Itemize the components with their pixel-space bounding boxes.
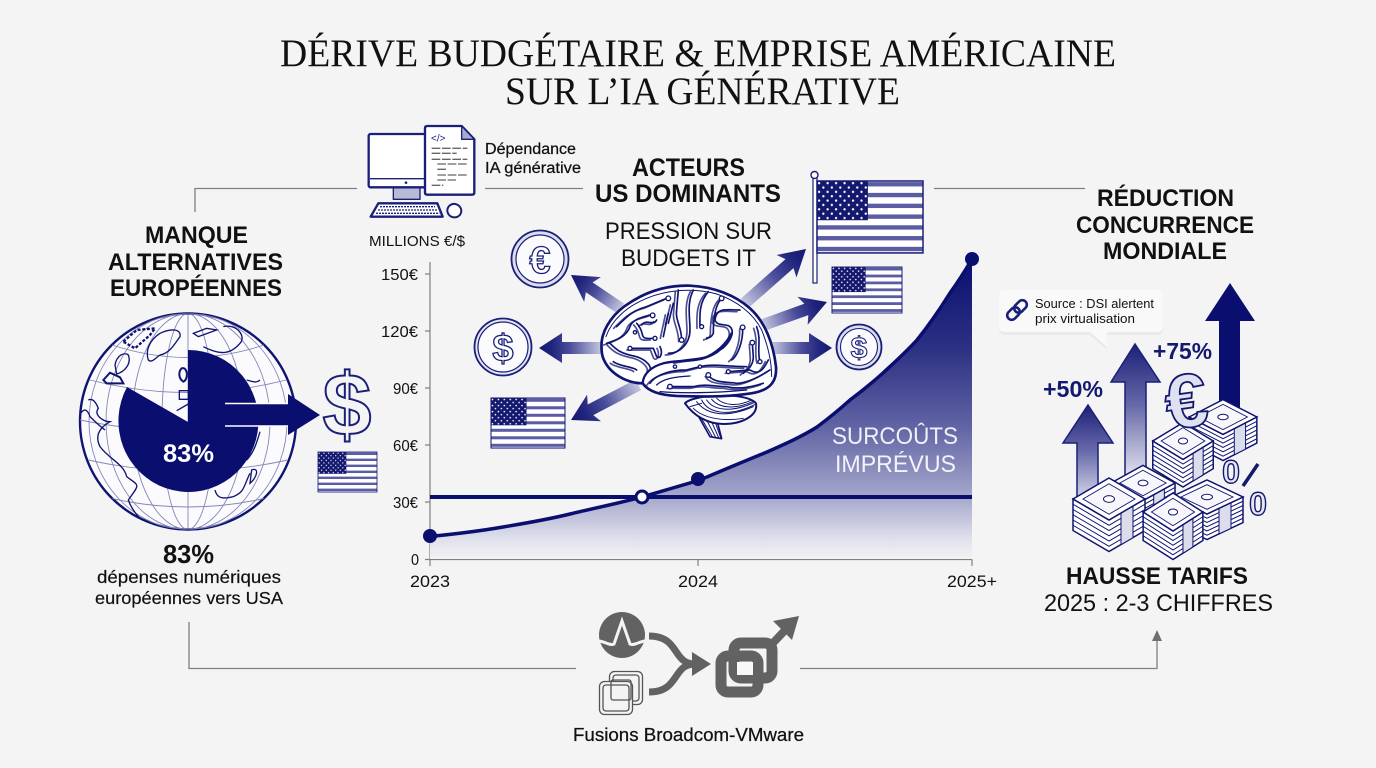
title: SUR L’IA GÉNÉRATIVE: [505, 69, 900, 113]
icon: Broadcom VMware merger: [599, 612, 799, 714]
icon: circuit brain: [601, 286, 776, 439]
icon: euro coin: €: [529, 240, 551, 282]
x axis labels: 2024: [678, 572, 718, 591]
curve line: [430, 259, 972, 536]
label: dépendance IA générative: IA générative: [485, 160, 581, 177]
heading: manque alternatives européennes: [108, 222, 283, 302]
y axis labels: 60€: [393, 438, 418, 455]
icon: computer and document: [369, 126, 474, 219]
stat: 83% dépenses: dépenses numériques: [97, 567, 281, 587]
callout: source: [999, 290, 1163, 350]
chart unit label: MILLIONS €/$: [369, 233, 466, 250]
text: hausse tarifs: HAUSSE TARIFS: [1066, 563, 1248, 590]
icon: euro coin: [512, 230, 568, 288]
x axis labels: [410, 572, 997, 591]
callout: source: Source : DSI alertent: [1035, 296, 1154, 311]
connector: top middle: [485, 188, 583, 190]
icon: globe with 83% pie: [80, 314, 296, 530]
x axis labels: 2023: [410, 572, 450, 591]
arrow: +50% gradient: [1063, 405, 1113, 505]
icon: money stacks: [1073, 357, 1267, 560]
connector: top right: [934, 188, 1085, 190]
y axis labels: 120€: [381, 324, 418, 341]
pie: 83%: 83%: [163, 440, 214, 468]
text: hausse tarifs: 2025 : 2-3 CHIFFRES: [1044, 590, 1273, 617]
heading: manque alternatives européennes: EUROPÉENNES: [110, 274, 282, 302]
icon: dollar coin right: $: [851, 332, 868, 365]
label: surcoûts imprévus: IMPRÉVUS: [835, 451, 956, 478]
chart: surcoûts curve: [369, 233, 997, 591]
label: fusions Broadcom-VMware: Fusions Broadcom-VMware: [573, 725, 804, 745]
icon: link: [1005, 298, 1029, 322]
icon: euro: €: [1159, 357, 1213, 447]
area under curve: [430, 259, 972, 559]
icon: percent: [1222, 454, 1267, 522]
heading: réduction concurrence mondiale: CONCURRENCE: [1076, 212, 1254, 239]
label: surcoûts imprévus: SURCOÛTS: [832, 422, 958, 450]
label: pression sur budgets IT: PRESSION SUR: [605, 218, 772, 245]
label: pression sur budgets IT: [605, 218, 772, 272]
threshold line: [430, 495, 972, 499]
icon: broadcom: [599, 612, 645, 658]
label: dépendance IA générative: [485, 141, 581, 177]
stat: 83% dépenses: [95, 539, 283, 608]
icon: merged squares with arrow: [721, 616, 799, 692]
heading: réduction concurrence mondiale: MONDIALE: [1103, 238, 1227, 265]
arrow: bottom right connector: [800, 630, 1162, 668]
icon: dollar coin left: [474, 318, 532, 376]
curve markers: [423, 252, 979, 543]
label: pression sur budgets IT: BUDGETS IT: [621, 245, 756, 272]
icon: vmware small: [600, 672, 642, 714]
heading: manque alternatives européennes: ALTERNATIVES: [108, 249, 283, 276]
arrow: +75% gradient: [1111, 344, 1160, 478]
connector: bottom left: [189, 622, 576, 668]
icon: percent: 0: [1249, 486, 1267, 522]
icon: dollar coin right: [836, 324, 882, 370]
label: surcoûts imprévus: [832, 422, 958, 478]
heading: réduction concurrence mondiale: RÉDUCTION: [1097, 184, 1234, 212]
heading: réduction concurrence mondiale: [1076, 184, 1254, 265]
label: +50%: +50%: [1043, 376, 1103, 402]
y axis labels: 30€: [393, 495, 418, 512]
icon: percent: 0: [1222, 454, 1240, 490]
icon: US flag right: [832, 267, 902, 313]
stat: 83% dépenses: 83%: [163, 539, 214, 569]
y axis labels: 150€: [381, 267, 418, 284]
icon: dollar sign: $: [323, 355, 371, 454]
heading: acteurs US dominants: ACTEURS: [632, 154, 745, 182]
y axis labels: [381, 267, 419, 569]
icon: dollar coin left: $: [492, 328, 514, 370]
icon: US flag with pole: [811, 172, 923, 283]
heading: acteurs US dominants: US DOMINANTS: [595, 180, 781, 208]
title: [280, 31, 1116, 113]
icon: US flag left: [491, 398, 565, 448]
heading: manque alternatives européennes: MANQUE: [145, 222, 248, 249]
arrow: globe to dollar: [225, 394, 320, 435]
pie: 83%: [118, 350, 258, 492]
chart axes: [425, 262, 972, 566]
connector: top left: [195, 188, 357, 212]
y axis labels: 90€: [393, 381, 418, 398]
arrows: radiating from brain: [539, 238, 832, 433]
arrow: navy tall: [1205, 283, 1255, 420]
y axis labels: 0: [411, 552, 419, 569]
title: DÉRIVE BUDGÉTAIRE & EMPRISE AMÉRICAINE: [280, 31, 1116, 75]
label: dépendance IA générative: Dépendance: [485, 141, 576, 158]
x axis labels: 2025+: [947, 572, 997, 591]
heading: acteurs US dominants: [595, 154, 781, 208]
arrow: merge: [649, 636, 711, 692]
label: +75%: +75%: [1153, 338, 1212, 364]
stat: 83% dépenses: européennes vers USA: [95, 588, 283, 608]
icon: small US flag: [318, 452, 377, 492]
callout: source: prix virtualisation: [1035, 311, 1135, 326]
text: hausse tarifs: [1044, 563, 1273, 617]
icon: computer and document: </>: [431, 134, 446, 145]
